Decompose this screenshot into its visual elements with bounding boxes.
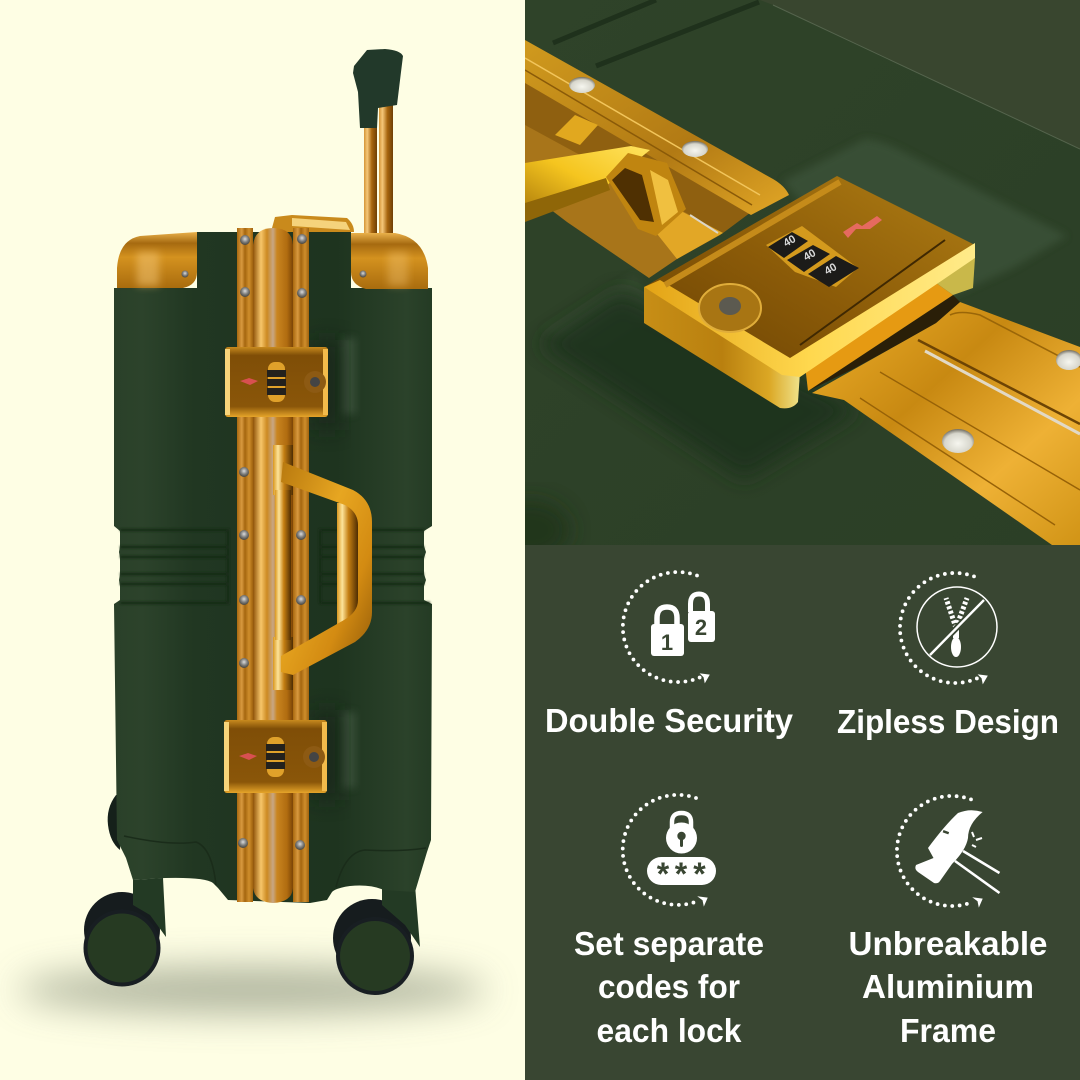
side carry handle [273,445,372,690]
top carry handle [272,215,354,232]
feature: unbreakable frame [848,796,1048,1049]
icon: two padlocks [651,594,715,656]
suitcase ground shadow [17,966,487,1014]
combination dials: 40 [782,233,798,250]
label: Unbreakable Aluminium Frame [848,925,1048,1049]
key screw [699,284,761,332]
lock close-up photo [490,0,1080,560]
shell grooves [553,0,759,66]
icon: dotted ring arrow [900,573,987,683]
frame rivets [238,234,307,850]
feature: double security [545,572,794,739]
label: Set separate codes for each lock [574,925,764,1049]
icon: hammer striking [915,810,1000,893]
label: Set separate codes for each lock: Set separate [574,925,764,962]
icon: dotted ring arrow [623,795,707,905]
gold corner caps [117,232,428,289]
lower combination lock [224,720,327,793]
icon: dotted ring arrow [623,572,709,682]
label: Double Security: Double Security [545,702,794,739]
icon: padlock with password [647,813,716,892]
raised shell plate [788,140,1061,286]
combination dials: 40 [802,247,818,264]
label: Set separate codes for each lock: each lock [596,1012,742,1049]
icon: padlock with password: * [657,856,670,892]
strap rivets [569,77,1080,453]
label: Set separate codes for each lock: codes for [598,968,740,1005]
suitcase body shell [114,232,432,947]
label: Zipless Design: Zipless Design [837,703,1059,740]
gold strap upper-left [525,40,789,278]
upper shell area beyond seam [760,0,1080,149]
lower-left corner shadow [525,501,566,545]
icon: dotted ring arrow [897,796,982,906]
dark green feature panel [525,545,1080,1080]
icon: two padlocks: 2 [695,615,707,640]
TSA mark [843,216,882,238]
body rib bands [120,530,430,603]
icon: padlock with password: * [675,856,688,892]
icon: two padlocks: 1 [661,630,673,655]
telescoping handle [353,49,403,235]
suitcase product illustration [84,49,432,995]
feature: zipless design [837,573,1059,740]
icon: crossed-out zipper [917,587,997,667]
upper combination lock [225,347,328,417]
lock drop shadow [539,290,860,480]
background: cream left panel [0,0,525,1080]
gold strap lower-right [808,295,1080,545]
back wheel hint [108,795,122,850]
aluminium frame strip [237,228,309,903]
body recess highlights [342,338,356,788]
label: Unbreakable Aluminium Frame: Aluminium [862,968,1034,1005]
suitcase wheels [84,892,414,995]
feature: separate codes [574,795,764,1049]
combination dials [766,226,859,287]
combination dials: 40 [822,261,839,278]
label: Unbreakable Aluminium Frame: Frame [900,1012,996,1049]
icon: padlock with password: * [693,856,706,892]
handle mount [525,115,686,236]
label: Unbreakable Aluminium Frame: Unbreakable [848,925,1048,962]
close-up lock body [644,176,975,408]
